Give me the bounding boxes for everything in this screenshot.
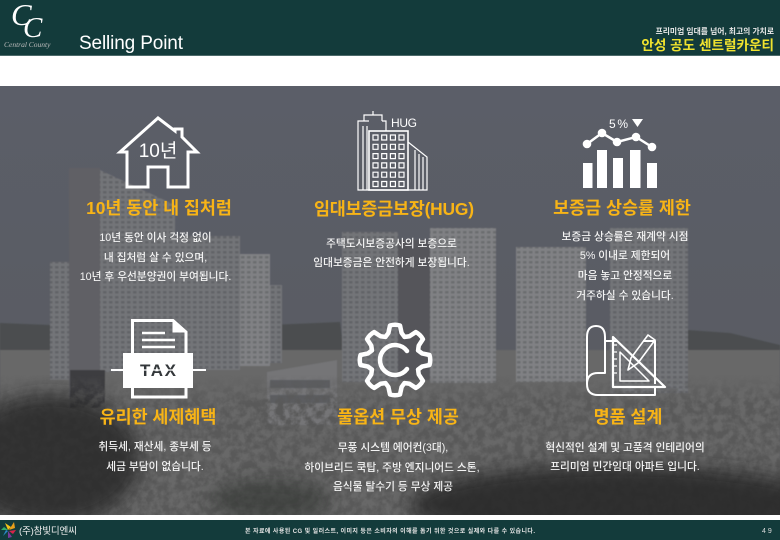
- company logo: (주)참빛디엔씨: [19, 526, 77, 537]
- description: 임대보증금은 안전하게 보장됩니다.: [313, 256, 470, 269]
- heading: 유리한 세제혜택: [100, 407, 216, 427]
- heading: 풀옵션 무상 제공: [337, 407, 459, 427]
- description: 세금 부담이 없습니다.: [106, 460, 204, 473]
- icon: house: 10년: [139, 140, 177, 162]
- page number: 49: [762, 528, 774, 535]
- description: 10년 후 우선분양권이 부여됩니다.: [80, 270, 231, 283]
- icon: chart: [583, 117, 657, 188]
- icon: HUG building: HUG: [391, 116, 417, 130]
- icon: gear: [360, 325, 430, 395]
- description: 무풍 시스템 에어컨(3대),: [338, 441, 448, 454]
- icon: HUG building: [358, 111, 427, 190]
- panel: full options: [304, 325, 480, 493]
- description: 혁신적인 설계 및 고품격 인테리어의: [545, 441, 705, 454]
- description: [304, 441, 480, 493]
- heading: 명품 설계: [594, 407, 662, 427]
- logo: [4, 0, 51, 49]
- footer bar: [0, 515, 780, 540]
- description: 10년 동안 이사 걱정 없이: [99, 231, 212, 244]
- description: 취득세, 재산세, 종부세 등: [98, 441, 212, 453]
- description: [562, 230, 688, 302]
- icon: tax document: [111, 320, 206, 397]
- description: 보증금 상승률은 재계약 시점: [562, 230, 688, 243]
- description: 내 집처럼 살 수 있으며,: [104, 251, 207, 264]
- heading: 보증금 상승률 제한: [553, 198, 691, 218]
- tagline: 프리미엄 임대를 넘어, 최고의 가치로: [656, 26, 774, 36]
- description: 주택도시보증공사의 보증으로: [326, 238, 457, 250]
- description: [80, 231, 231, 283]
- disclaimer: 본 자료에 사용된 CG 및 일러스트, 이미지 등은 소비자의 이해를 돕기 위한 것으로 실제와 다를 수 있습니다.: [245, 527, 535, 535]
- panel: premium design: [545, 326, 705, 473]
- logo: C: [23, 12, 43, 44]
- icon: tax document: TAX: [140, 361, 177, 380]
- icon: chart: 5%: [609, 117, 628, 131]
- company logo: [1, 522, 77, 538]
- description: [313, 238, 470, 269]
- description: 5% 이내로 제한되어: [580, 250, 670, 262]
- description: 마음 놓고 안정적으로: [578, 270, 672, 282]
- description: [98, 441, 212, 473]
- description: [545, 441, 705, 473]
- logo: Central County: [4, 40, 51, 49]
- description: 프리미엄 민간임대 아파트 입니다.: [550, 460, 700, 473]
- ground texture: [0, 380, 780, 515]
- icon: blueprint: [587, 326, 665, 395]
- panel: tax benefit: [98, 320, 216, 473]
- header bar: [0, 0, 780, 56]
- description: 음식물 탈수기 등 무상 제공: [333, 480, 453, 493]
- heading: 임대보증금보장(HUG): [314, 199, 474, 219]
- icon: house: [120, 118, 197, 187]
- panel: 10-year home: [80, 118, 232, 283]
- panel: deposit increase limit: [553, 117, 691, 302]
- project name: 안성 공도 센트럴카운티: [641, 38, 774, 53]
- page title: Selling Point: [79, 33, 184, 54]
- panel: deposit guarantee: [313, 111, 474, 269]
- description: 하이브리드 쿡탑, 주방 엔지니어드 스톤,: [304, 461, 480, 474]
- description: 거주하실 수 있습니다.: [576, 289, 674, 302]
- heading: 10년 동안 내 집처럼: [86, 198, 232, 218]
